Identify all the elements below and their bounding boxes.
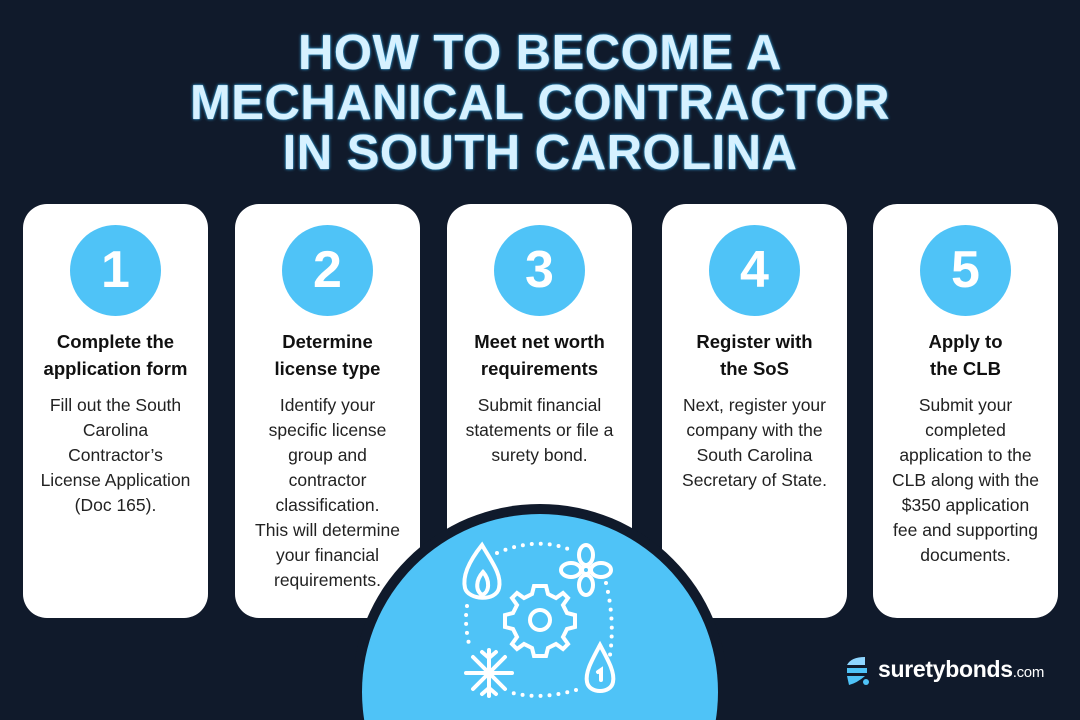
card 1: Fill out the South [50,395,181,415]
card 4: Next, register your [683,395,826,415]
card 4: 4 [740,241,769,299]
card 5: completed [925,420,1006,440]
card 4: Register with [696,331,813,352]
card 2: This will determine [255,520,400,540]
card 5: $350 application [902,495,1029,515]
card 2: contractor [289,470,366,490]
title: MECHANICAL CONTRACTOR [190,76,890,130]
card 1: Complete the [57,331,174,352]
card 2 [235,204,420,618]
card 1: application form [44,358,187,379]
card 1: 1 [101,241,130,299]
card 3: surety bond. [491,445,588,465]
title [190,26,890,180]
card 5 [873,204,1058,618]
card 3: 3 [525,241,554,299]
card 2: license type [275,358,380,379]
card 2: group and [288,445,367,465]
card 1: Contractor’s [68,445,163,465]
card 5: Submit your [919,395,1012,415]
card 5: the CLB [930,358,1001,379]
title: HOW TO BECOME A [298,26,782,80]
card 2: classification. [275,495,380,515]
card 2: Determine [282,331,373,352]
card 3: requirements [481,358,598,379]
card 2: requirements. [274,570,381,590]
card 1: (Doc 165). [75,495,156,515]
logo: suretybonds.com [878,656,1044,682]
card 4: Secretary of State. [682,470,827,490]
card 3: Submit financial [478,395,601,415]
card 2: 2 [313,241,342,299]
card 4: the SoS [720,358,789,379]
card 2: Identify your [280,395,375,415]
card 5: Apply to [928,331,1002,352]
card 2: specific license [269,420,386,440]
icon circle: mechanical [362,504,718,720]
card 1: Carolina [83,420,148,440]
card 5: application to the [899,445,1032,465]
card 4: South Carolina [697,445,812,465]
card 1: License Application [41,470,190,490]
title: IN SOUTH CAROLINA [283,126,797,180]
card 5: CLB along with the [892,470,1039,490]
card 5: 5 [951,241,980,299]
card 3: Meet net worth [474,331,605,352]
card 2: your financial [276,545,379,565]
card 5: fee and supporting [893,520,1038,540]
card 3 [447,204,632,618]
card 3: statements or file a [466,420,613,440]
card 4: company with the [686,420,823,440]
card 1 [23,204,208,618]
card 4 [662,204,847,618]
card 5: documents. [920,545,1011,565]
